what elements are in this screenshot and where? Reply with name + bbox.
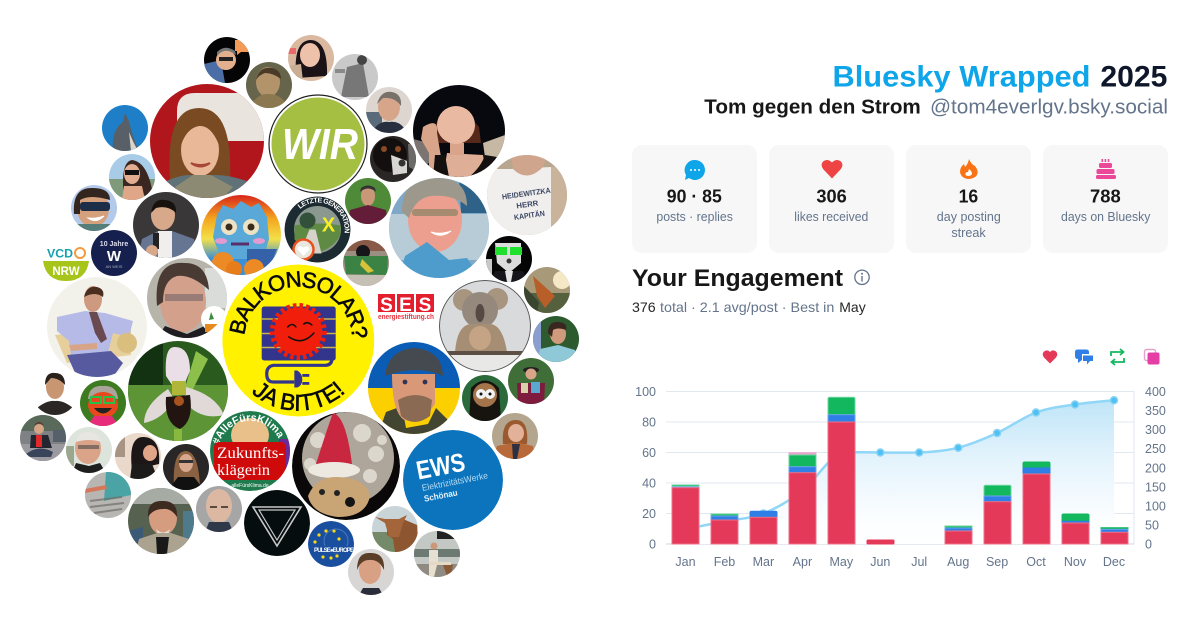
avatar: woman in wide black hat: [413, 85, 505, 177]
icon: chat bubble: [685, 160, 705, 180]
avatar: EWS logo: EWS: [414, 447, 468, 486]
right axis labels: 350: [1145, 404, 1166, 418]
avatar: man with curly hair: [348, 549, 394, 595]
avatar: Pulse of Europe logo: [308, 521, 354, 567]
avatar: grey-haired man in suit: [366, 87, 412, 133]
avatar: man in grey suit with microphone: [133, 192, 199, 258]
avatar: SES energiestiftung logo: E: [399, 295, 412, 316]
heading: Your Engagement: Your Engagement: [632, 265, 843, 292]
avatar: EWS logo: ElektrizitätsWerke: [421, 470, 489, 493]
avatar: WIR logo: WIR: [282, 120, 358, 169]
stat card: likes received: 306: [816, 186, 847, 206]
avatar: woman in orange jacket: [492, 413, 538, 459]
avatar: woman with dark curly hair: [115, 433, 161, 479]
icon: reposts: [1111, 349, 1124, 365]
right axis labels: 250: [1145, 442, 1166, 456]
shirt slogan: HEIDEWITZKA: [501, 186, 552, 201]
avatar: hedgehog toy with Santa hat: [292, 412, 400, 520]
bar: Apr: [789, 453, 816, 544]
cumulative area: [686, 400, 1114, 544]
avatar: SES energiestiftung logo: S: [419, 295, 431, 316]
header: title: 2025: [1100, 60, 1167, 94]
avatar: cartoon man with speech bubble: [204, 37, 250, 83]
avatar: WIR logo: [268, 94, 368, 194]
stat card: day posting streak: day posting: [937, 210, 1001, 224]
right axis labels: 50: [1145, 518, 1159, 532]
avatar: elderly man with glasses: [66, 427, 112, 473]
shirt slogan: [502, 188, 551, 220]
right axis labels: 200: [1145, 462, 1166, 476]
avatar: anniversary W logo: W: [107, 248, 122, 265]
month labels: Nov: [1064, 555, 1087, 569]
stat card: likes received: likes received: [794, 210, 868, 224]
avatar: VCD NRW logo: [43, 248, 89, 281]
avatar: Letzte Generation badge: [284, 196, 350, 262]
avatar: Letzte Generation badge: X: [322, 214, 336, 236]
stat card: posts and replies: [632, 145, 757, 253]
avatar: blue monster with pumpkins: [201, 195, 281, 279]
stat card: days on Bluesky: [1043, 145, 1168, 253]
bar: Dec: [1101, 528, 1128, 544]
chart: monthly engagement: [635, 385, 1166, 569]
left axis labels: 40: [642, 476, 656, 490]
left axis labels: [635, 385, 656, 552]
avatar: man with blue sunglasses: [71, 185, 117, 231]
avatar: SES energiestiftung logo: energiestiftung.ch: [378, 312, 434, 321]
month labels: May: [829, 555, 854, 569]
avatar: double triangle logo: [244, 490, 310, 556]
avatar: anniversary W logo: [91, 230, 137, 276]
stat card: posts and replies: posts · replies: [656, 210, 733, 224]
avatar: orange puppet with green glasses: [80, 380, 126, 426]
avatar: young man in light blue shirt: [533, 316, 579, 362]
bar: Sep: [984, 485, 1011, 544]
month labels: [675, 555, 1125, 569]
avatar: laughing man in beige jacket: [128, 488, 194, 554]
avatar: #AlleFürsKlima Zukunftsklägerin badge: alleFürsKlima.de: [231, 483, 269, 489]
avatar: South Park style cartoon woman: [462, 375, 508, 421]
stat card: day posting streak: streak: [951, 226, 986, 240]
avatar: Pulse of Europe logo: PULSE●EUROPE: [314, 548, 354, 554]
avatar: pencil sketch figure: [332, 54, 378, 100]
line markers: [760, 397, 1118, 517]
avatar cluster: [20, 35, 579, 595]
avatar: bald man: [196, 486, 242, 532]
right axis labels: [1145, 385, 1166, 552]
stat card: posts and replies: 90 · 85: [667, 186, 722, 206]
bar: Feb: [711, 514, 738, 544]
bar: Jun: [867, 540, 894, 544]
avatar: sunset with branches: [524, 267, 571, 313]
right axis labels: 300: [1145, 423, 1166, 437]
stat card: days on Bluesky: 788: [1090, 186, 1121, 206]
avatar: smiling grey-haired man with glasses: [389, 178, 489, 278]
bar: May: [828, 397, 855, 544]
month labels: Dec: [1103, 555, 1125, 569]
avatar: Balkonsolar? Ja bitte! badge: JA BITTE!: [252, 381, 345, 411]
engagement summary: May: [839, 299, 866, 315]
avatar: #AlleFürsKlima Zukunftsklägerin badge: klägerin: [217, 462, 270, 479]
icon: quotes: [1144, 350, 1160, 364]
shirt slogan: KAPITÄN: [513, 209, 545, 222]
bar: Nov: [1062, 514, 1089, 544]
gridlines and axes: [666, 392, 1134, 544]
avatar: smiling woman against red wall: [150, 84, 265, 198]
avatar: person holding green flag: [343, 240, 389, 286]
icon: birthday cake: [1096, 159, 1116, 179]
month labels: Sep: [986, 555, 1008, 569]
avatar: koala: [439, 280, 531, 372]
avatar: woman in white slogan shirt: [487, 155, 567, 235]
avatar: woman with black hair: [288, 35, 334, 81]
avatar: SES energiestiftung logo: S: [380, 295, 393, 316]
month labels: Aug: [947, 555, 969, 569]
legend: engagement types: [1043, 349, 1160, 365]
avatar: EWS logo: Schönau: [423, 487, 458, 504]
avatar: Bernese mountain dog: [370, 136, 416, 182]
bar: Jan: [672, 485, 699, 544]
avatar: anniversary W logo: AN WEIS: [106, 264, 123, 269]
header: profile name and handle: Tom gegen den Strom: [704, 96, 921, 118]
stat card: days on Bluesky: days on Bluesky: [1061, 210, 1151, 224]
avatar: man in striped tie lounging on sofa: [47, 277, 147, 377]
avatar: #AlleFürsKlima Zukunftsklägerin badge: Zukunfts-: [217, 445, 284, 462]
avatar: SES energiestiftung logo: [378, 294, 434, 321]
avatar: #AlleFürsKlima Zukunftsklägerin badge: [210, 411, 290, 491]
bar: Aug: [945, 526, 972, 544]
left axis labels: 100: [635, 385, 656, 399]
avatar: anniversary W logo: 10 Jahre: [100, 241, 128, 248]
avatar: VCD NRW logo: VCD: [47, 248, 73, 260]
avatar: woman with glasses and long hair: [163, 444, 209, 490]
icon: heart: [822, 160, 842, 178]
left axis labels: 20: [642, 507, 656, 521]
avatar: older man with glasses and climate logo: [147, 258, 227, 338]
month labels: Jun: [870, 555, 890, 569]
avatar: illustrated man in cap on Ukrainian flag: [368, 342, 460, 434]
icon: replies: [1075, 350, 1093, 364]
avatar: woman sitting cross-legged on street: [20, 415, 66, 461]
avatar: man in black t-shirt: [32, 369, 78, 415]
stacked bars: [672, 397, 1128, 544]
month labels: Jan: [675, 555, 696, 569]
avatar: Balkonsolar? Ja bitte! badge: [222, 264, 374, 416]
right axis labels: 0: [1145, 538, 1152, 552]
header: profile name and handle: [704, 96, 1168, 118]
avatar: woman with sunglasses: [109, 154, 155, 200]
header: title: Bluesky Wrapped: [832, 60, 1090, 94]
stat card: day posting streak: 16: [959, 186, 978, 206]
avatar: Balkonsolar? Ja bitte! badge: BALKONSOLAR?: [229, 271, 368, 338]
avatar: newspaper clipping: [85, 472, 131, 518]
avatar: highland cow: [372, 506, 418, 552]
month labels: Apr: [793, 555, 812, 569]
month labels: Oct: [1026, 555, 1046, 569]
avatar: bee orchid flower: [128, 341, 228, 441]
right axis labels: 400: [1145, 385, 1166, 399]
bar: Mar: [750, 511, 777, 544]
right axis labels: 150: [1145, 480, 1166, 494]
avatar: woman in hat holding a book: [508, 358, 554, 404]
icon: likes: [1043, 350, 1057, 364]
header: profile name and handle: @tom4everlgv.bsky.social: [930, 96, 1168, 118]
month labels: Jul: [911, 555, 927, 569]
engagement summary: total · 2.1 avg/post · Best in: [660, 299, 834, 315]
avatar: woman at desk on terrace: [414, 531, 460, 577]
avatar: VCD NRW logo: NRW: [52, 266, 80, 278]
avatar: EWS logo: [403, 430, 503, 530]
icon: flame: [960, 159, 978, 179]
avatar: man in maroon shirt on green: [345, 178, 391, 224]
engagement summary: 376: [632, 299, 656, 315]
avatar: Letzte Generation badge: LETZTE GENERATION: [298, 198, 350, 233]
avatar: dolphin in blue water: [102, 105, 148, 151]
shirt slogan: HERR: [516, 198, 539, 211]
avatar: painted portrait: [246, 62, 292, 108]
left axis labels: 60: [642, 446, 656, 460]
icon: info: [855, 270, 869, 284]
left axis labels: 80: [642, 416, 656, 430]
left axis labels: 0: [649, 538, 656, 552]
avatar: #AlleFürsKlima Zukunftsklägerin badge: #AlleFürsKlima: [212, 414, 282, 444]
stat card: day posting streak: [906, 145, 1031, 253]
cumulative line: [686, 400, 1114, 529]
stat card: likes received: [769, 145, 894, 253]
avatar: white dog with green sunglasses: [486, 236, 532, 282]
right axis labels: 100: [1145, 500, 1166, 514]
month labels: Mar: [753, 555, 774, 569]
bar: Oct: [1023, 462, 1050, 544]
month labels: Feb: [714, 555, 735, 569]
